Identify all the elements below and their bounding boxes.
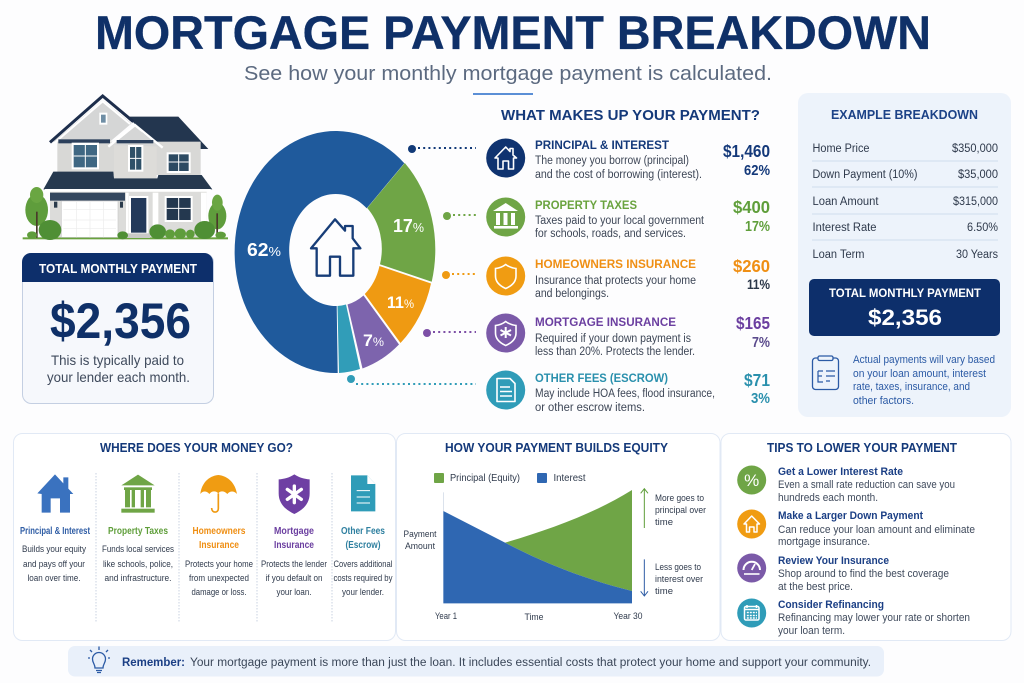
segment: other fees 3%	[338, 304, 360, 373]
total monthly payment card: This is typically paid to	[51, 352, 184, 368]
column: property taxes	[102, 475, 174, 584]
item: principal and interest: The money you borrow (principal)	[535, 155, 689, 167]
note text	[853, 354, 995, 407]
item: other fees: OTHER FEES (ESCROW)	[535, 371, 668, 385]
item: homeowners insurance: 11%	[747, 276, 770, 292]
label 7%: 7%	[363, 331, 384, 350]
item: other fees: $71	[744, 370, 770, 390]
item: mortgage insurance	[486, 313, 770, 358]
column: mortgage insurance: your loan.	[276, 587, 312, 598]
column: mortgage insurance: Mortgage	[274, 525, 314, 537]
column: other fees	[334, 475, 393, 598]
column: principal and interest: Builds your equity	[22, 544, 86, 555]
tip: consider refinancing	[737, 598, 970, 637]
column: homeowners insurance	[185, 475, 253, 598]
item: property taxes: Taxes paid to your local government	[535, 215, 705, 227]
chart labels: Amount	[405, 541, 435, 552]
column: property taxes: like schools, police,	[103, 559, 173, 570]
chart labels: principal over	[655, 505, 706, 516]
tip: consider refinancing: Consider Refinancing	[778, 599, 884, 611]
icon: umbrella	[200, 475, 237, 512]
item: mortgage insurance: Required if your down payment is	[535, 333, 691, 345]
icon: house	[486, 138, 525, 178]
legend: Principal (Equity)	[450, 473, 520, 484]
tip: larger down payment: Make a Larger Down Payment	[778, 510, 923, 522]
total monthly payment card: TOTAL MONTHLY PAYMENT	[39, 262, 197, 276]
column: principal and interest: loan over time.	[28, 573, 80, 584]
icon: blue house	[37, 474, 73, 513]
tip: larger down payment: Can reduce your loan amount and eliminate	[778, 524, 975, 536]
column: property taxes: and infrastructure.	[104, 573, 172, 584]
tip: consider refinancing: your loan term.	[778, 625, 845, 637]
item: property taxes: PROPERTY TAXES	[535, 198, 637, 212]
icon: house in donut centre	[311, 219, 360, 276]
item: mortgage insurance: less than 20%. Protects the lender.	[535, 346, 695, 358]
arrow: up green	[641, 489, 648, 528]
legend: Interest	[554, 473, 586, 484]
item: homeowners insurance: HOMEOWNERS INSURANCE	[535, 257, 696, 271]
panel: tips to lower your payment	[721, 434, 1011, 640]
tip: review insurance: at the best price.	[778, 581, 853, 593]
subtitle: See how your monthly mortgage payment is calculated.	[244, 62, 772, 85]
item: other fees: May include HOA fees, flood insurance,	[535, 388, 715, 400]
tip: lower interest rate: hundreds each month.	[778, 492, 878, 504]
column: principal and interest: Principal & Interest	[20, 526, 91, 537]
callout: remember banner: Your mortgage payment is more than just the loan. It includes essential costs that protect your home and support your community.	[190, 657, 871, 669]
callout: remember banner	[68, 646, 884, 676]
column: property taxes: Funds local services	[102, 544, 174, 555]
arrow: down blue	[641, 559, 648, 596]
column: homeowners insurance: Protects your home	[185, 559, 253, 570]
chart labels: Year 30	[614, 611, 642, 622]
panel: where does your money go	[14, 434, 396, 640]
column: other fees: (Escrow)	[346, 539, 380, 551]
segment: homeowners insurance 11%	[365, 266, 431, 343]
chart labels: time	[655, 517, 673, 528]
item: principal and interest: 62%	[744, 163, 770, 179]
item: mortgage insurance: $165	[736, 313, 770, 333]
column: mortgage insurance: if you default on	[266, 573, 322, 584]
icon: purple shield	[279, 474, 310, 514]
rows table: Loan Amount	[812, 196, 879, 208]
panel: example breakdown	[798, 93, 1011, 417]
chart labels	[404, 493, 706, 623]
column: homeowners insurance: Homeowners	[192, 525, 246, 537]
column: property taxes: Property Taxes	[108, 525, 168, 537]
house illustration	[23, 96, 228, 240]
heading: EXAMPLE BREAKDOWN	[831, 107, 978, 122]
column: other fees: your lender.	[342, 587, 384, 598]
column: principal and interest	[20, 474, 91, 584]
item: mortgage insurance: 7%	[752, 335, 770, 351]
item: other fees: or other escrow items.	[535, 402, 645, 414]
rows table	[812, 143, 998, 261]
item: homeowners insurance: and belongings.	[535, 288, 609, 300]
heading: HOW YOUR PAYMENT BUILDS EQUITY	[445, 440, 668, 455]
tip: larger down payment: mortgage insurance.	[778, 536, 870, 548]
item: principal and interest: $1,460	[723, 141, 770, 161]
icon: bank building	[486, 198, 525, 236]
label 62%: 62%	[247, 240, 281, 260]
column: homeowners insurance: damage or loss.	[192, 587, 246, 598]
item: homeowners insurance	[486, 256, 770, 300]
note text: on your loan amount, interest	[853, 368, 986, 380]
column: other fees: Other Fees	[341, 525, 385, 537]
legend	[434, 473, 586, 484]
rows table: Loan Term	[812, 249, 864, 261]
item: homeowners insurance: $260	[733, 256, 770, 276]
tip: lower interest rate	[737, 466, 955, 504]
rows table: $35,000	[958, 169, 998, 181]
rows table: Interest Rate	[812, 222, 876, 234]
icon: green bank	[121, 475, 155, 513]
tip: review insurance: Review Your Insurance	[778, 555, 889, 567]
chart labels: More goes to	[655, 493, 704, 504]
chart labels: Time	[524, 612, 544, 623]
tip: larger down payment	[737, 510, 975, 548]
rows table: $315,000	[953, 196, 998, 208]
segment: principal and interest 62%	[235, 131, 404, 373]
note text: rate, taxes, insurance, and	[853, 381, 970, 393]
item: other fees	[486, 370, 770, 414]
rows table: 30 Years	[956, 249, 998, 261]
icon: document	[486, 370, 525, 410]
icon: teal document	[351, 475, 375, 511]
title: MORTGAGE PAYMENT BREAKDOWN	[95, 7, 931, 60]
column: other fees: Covers additional	[334, 559, 392, 570]
item: other fees: 3%	[751, 391, 770, 407]
item: mortgage insurance: MORTGAGE INSURANCE	[535, 315, 676, 329]
item: property taxes: 17%	[745, 219, 770, 235]
leader lines	[347, 145, 476, 384]
column: mortgage insurance: Protects the lender	[261, 559, 328, 570]
tip: review insurance: Shop around to find the best coverage	[778, 568, 949, 580]
item: property taxes: $400	[733, 197, 770, 217]
chart labels: Payment	[404, 529, 437, 540]
total monthly payment card: your lender each month.	[47, 369, 190, 385]
heading: WHERE DOES YOUR MONEY GO?	[100, 440, 293, 455]
chart labels: time	[655, 586, 673, 597]
segment: mortgage insurance 7%	[348, 296, 399, 368]
icon: clipboard	[812, 356, 838, 390]
column: homeowners insurance: Insurance	[199, 539, 239, 551]
heading: what makes up your payment: WHAT MAKES UP YOUR PAYMENT?	[501, 107, 760, 124]
item: property taxes: for schools, roads, and services.	[535, 228, 686, 240]
chart labels: Year 1	[435, 611, 457, 622]
chart labels: Less goes to	[655, 562, 701, 573]
panel: how your payment builds equity	[396, 434, 720, 640]
item: homeowners insurance: Insurance that protects your home	[535, 275, 696, 287]
rows table: Down Payment (10%)	[812, 169, 918, 181]
label 17%: 17%	[393, 215, 424, 236]
icon: light bulb	[88, 646, 110, 672]
column: homeowners insurance: from unexpected	[189, 573, 249, 584]
chart labels: interest over	[655, 574, 703, 585]
column: principal and interest: and pays off your	[23, 559, 86, 570]
callout: remember banner: Remember:	[122, 657, 185, 669]
total box: $2,356	[868, 305, 942, 330]
heading: TIPS TO LOWER YOUR PAYMENT	[767, 440, 957, 455]
rows table: $350,000	[952, 143, 998, 155]
area chart	[443, 489, 648, 603]
icon: shield	[486, 256, 525, 296]
tip: review insurance	[737, 554, 949, 593]
tip: lower interest rate: %	[744, 471, 759, 490]
total box	[809, 279, 1000, 336]
item: principal and interest	[486, 138, 770, 181]
item: principal and interest: PRINCIPAL & INTEREST	[535, 138, 670, 152]
column: other fees: costs required by	[334, 573, 393, 584]
item: principal and interest: and the cost of borrowing (interest).	[535, 169, 702, 181]
tip: lower interest rate: Even a small rate reduction can save you	[778, 479, 955, 491]
segment: property taxes 17%	[367, 163, 435, 282]
label 11%: 11%	[387, 293, 414, 312]
note text: Actual payments will vary based	[853, 354, 995, 366]
total box: TOTAL MONTHLY PAYMENT	[829, 286, 982, 300]
rows table: Home Price	[812, 143, 870, 155]
note text: other factors.	[853, 395, 914, 407]
icon: shield with star	[486, 314, 525, 352]
total monthly payment card: $2,356	[50, 293, 191, 349]
tip: consider refinancing: Refinancing may lower your rate or shorten	[778, 612, 970, 624]
donut chart	[235, 131, 435, 373]
item: property taxes	[486, 197, 770, 240]
column: mortgage insurance	[261, 474, 328, 598]
tip: lower interest rate: Get a Lower Interest Rate	[778, 466, 903, 478]
column: mortgage insurance: Insurance	[274, 539, 314, 551]
total monthly payment card	[22, 253, 214, 404]
rows table: 6.50%	[967, 222, 998, 234]
